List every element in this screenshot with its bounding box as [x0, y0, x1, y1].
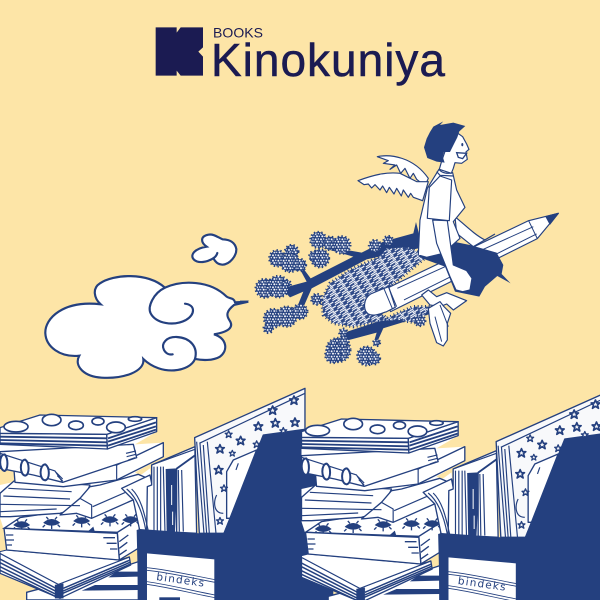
branches — [282, 222, 419, 307]
ring binder — [0, 443, 163, 487]
label window — [159, 597, 180, 600]
smile — [457, 153, 467, 159]
hair — [424, 121, 465, 163]
star book — [195, 388, 305, 533]
patterned cover — [4, 500, 139, 560]
far arm — [455, 217, 495, 247]
pile silhouette — [0, 415, 163, 560]
logo small word: BOOKS — [213, 24, 263, 40]
striped book — [27, 562, 138, 600]
face — [439, 130, 469, 173]
small cloud — [192, 235, 236, 265]
eye — [461, 143, 463, 146]
sock and shoe — [422, 290, 467, 346]
second book stack — [302, 392, 600, 600]
big cloud — [45, 276, 248, 378]
label word right: bindeks — [457, 575, 506, 594]
blue box — [137, 426, 333, 600]
pencil — [365, 213, 558, 315]
pencil eraser — [365, 287, 395, 315]
tall dark spine book — [122, 447, 197, 533]
top dotted book — [0, 414, 157, 449]
lower branch — [340, 307, 430, 342]
logo mark — [156, 27, 203, 76]
logo — [156, 24, 445, 86]
label stripes — [147, 568, 215, 598]
logo name: Kinokuniya — [211, 34, 445, 86]
open book bottom — [0, 550, 131, 598]
box label — [147, 553, 214, 600]
loose papers book — [0, 474, 152, 518]
label word left: bindeks — [156, 571, 205, 590]
boy flying on a pencil — [240, 121, 558, 365]
flower clusters — [256, 232, 425, 365]
book stacks — [0, 388, 333, 600]
collar — [437, 169, 453, 176]
wings — [358, 156, 428, 201]
near sleeve — [427, 176, 452, 221]
thick book — [4, 528, 128, 560]
exhaust tip — [240, 301, 249, 304]
trousers — [418, 242, 511, 297]
shirt — [418, 169, 465, 257]
foliage brush — [322, 247, 431, 327]
near arm and hand — [433, 220, 472, 292]
